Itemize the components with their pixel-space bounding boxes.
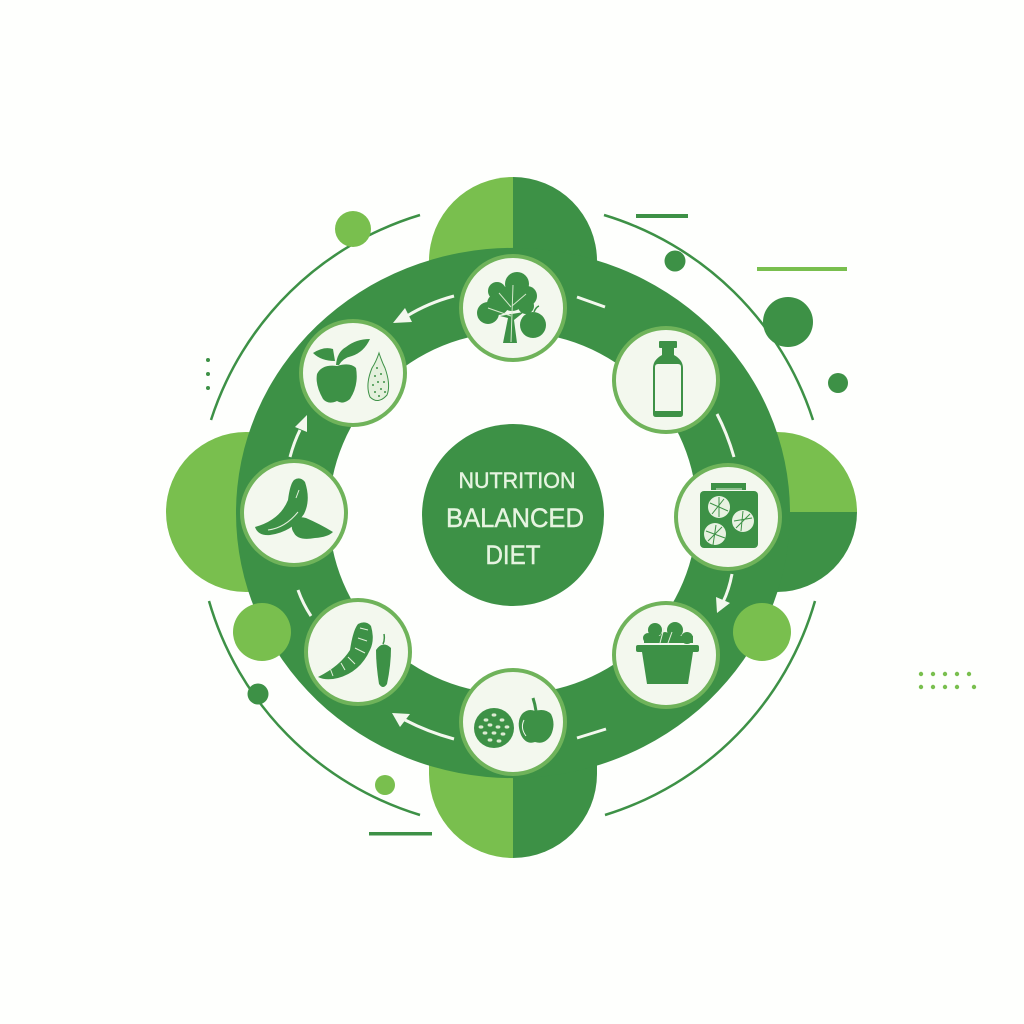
icon node: leafy greens and tomato bbox=[461, 256, 565, 360]
center title: NUTRITION bbox=[458, 468, 576, 493]
icon node: cucumber and chili bbox=[306, 600, 410, 704]
icon node: jar with nuts bbox=[676, 465, 780, 569]
icon node: bowl of greens bbox=[614, 603, 718, 707]
lobe: top bbox=[429, 177, 597, 300]
lobe: right bbox=[760, 432, 857, 592]
center title bbox=[446, 468, 584, 570]
dot cluster: right bbox=[919, 672, 976, 689]
outer orbit lines bbox=[209, 215, 815, 815]
center title: DIET bbox=[486, 540, 540, 570]
arrows on the ring bbox=[290, 296, 734, 739]
arrowheads bbox=[295, 308, 730, 727]
accent dots and dashes bbox=[233, 211, 848, 836]
center title: BALANCED bbox=[446, 503, 584, 533]
main ring bbox=[236, 248, 790, 778]
icon node: cucumber and pepper bbox=[242, 461, 346, 565]
icon node: bottle bbox=[614, 328, 718, 432]
lobe: left bbox=[166, 432, 326, 592]
lobe: bottom bbox=[429, 740, 597, 858]
icon node: bell pepper and squash bbox=[301, 321, 405, 425]
dot cluster: left bbox=[206, 358, 210, 390]
icon node: grain ball and apple bbox=[461, 670, 565, 774]
center circle bbox=[422, 424, 604, 606]
